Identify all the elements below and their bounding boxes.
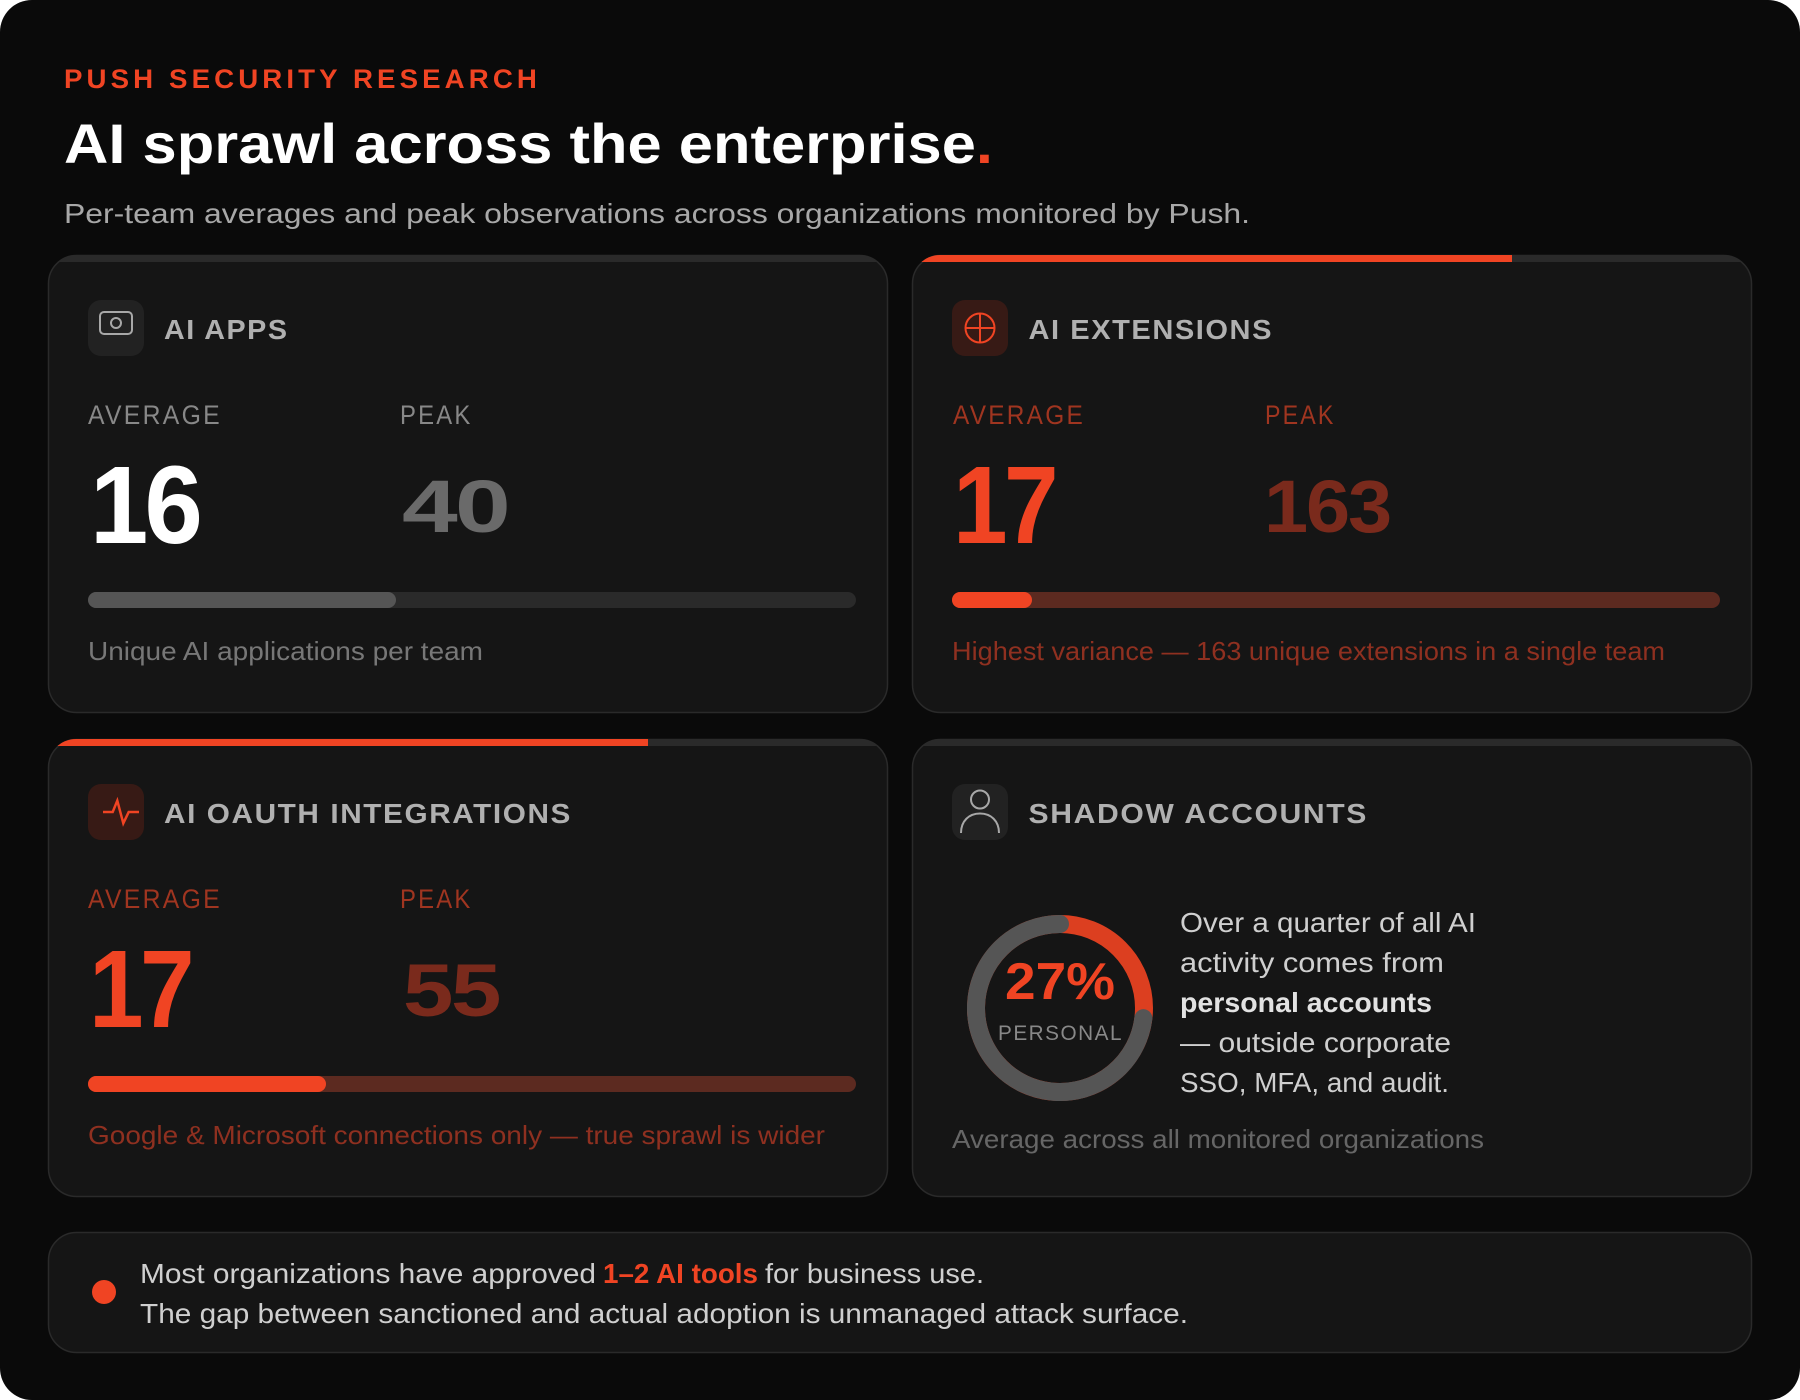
description: personal accounts <box>1180 987 1432 1018</box>
donut value: 27% <box>1005 953 1115 1011</box>
peak label: PEAK <box>1265 400 1336 430</box>
peak label: PEAK <box>400 884 472 914</box>
callout <box>48 1232 1752 1352</box>
icon: dot <box>92 1280 116 1304</box>
eyebrow: PUSH SECURITY RESEARCH <box>64 64 541 94</box>
description: activity comes from <box>1180 947 1444 978</box>
header <box>64 64 1250 229</box>
callout text: for business use. <box>765 1258 984 1289</box>
description: — outside corporate <box>1180 1027 1451 1058</box>
icon: app window <box>88 300 144 356</box>
peak value: 55 <box>403 949 500 1032</box>
title: AI sprawl across the enterprise . <box>64 112 993 175</box>
footnote: Average across all monitored organizations <box>952 1124 1484 1154</box>
panel: AI extensions <box>912 255 1752 712</box>
peak value: 163 <box>1264 465 1390 548</box>
caption: Unique AI applications per team <box>88 636 483 666</box>
panel: AI apps <box>48 255 888 712</box>
callout text: Most organizations have approved <box>140 1258 596 1289</box>
average value: 17 <box>89 928 191 1051</box>
progress bar <box>88 592 856 608</box>
average value: 16 <box>90 444 200 567</box>
description: Over a quarter of all AI <box>1180 907 1476 938</box>
description: SSO, MFA, and audit. <box>1180 1067 1449 1098</box>
icon: crosshair <box>952 300 1008 356</box>
icon: person <box>952 784 1008 840</box>
callout text: 1–2 AI tools <box>603 1258 758 1289</box>
average label: AVERAGE <box>88 400 222 430</box>
progress bar <box>88 1076 856 1092</box>
heading: SHADOW ACCOUNTS <box>1028 798 1368 829</box>
peak value: 40 <box>402 465 508 548</box>
subtitle: Per-team averages and peak observations across organizations monitored by Push. <box>64 198 1250 229</box>
caption: Highest variance — 163 unique extensions in a single team <box>952 636 1665 666</box>
average value: 17 <box>953 444 1055 567</box>
average label: AVERAGE <box>953 400 1085 430</box>
donut chart <box>976 924 1144 1092</box>
panel: shadow accounts <box>912 739 1752 1196</box>
average label: AVERAGE <box>88 884 222 914</box>
heading: AI EXTENSIONS <box>1028 314 1273 345</box>
callout text: The gap between sanctioned and actual adoption is unmanaged attack surface. <box>140 1298 1188 1329</box>
peak label: PEAK <box>400 400 472 430</box>
description <box>1180 907 1476 1098</box>
heading: AI OAUTH INTEGRATIONS <box>164 798 572 829</box>
panel: AI OAuth integrations <box>48 739 888 1196</box>
progress bar <box>952 592 1720 608</box>
callout text <box>140 1258 1188 1329</box>
caption: Google & Microsoft connections only — true sprawl is wider <box>88 1120 825 1150</box>
donut label: PERSONAL <box>998 1022 1123 1045</box>
heading: AI APPS <box>164 314 288 345</box>
icon: pulse <box>88 784 144 840</box>
